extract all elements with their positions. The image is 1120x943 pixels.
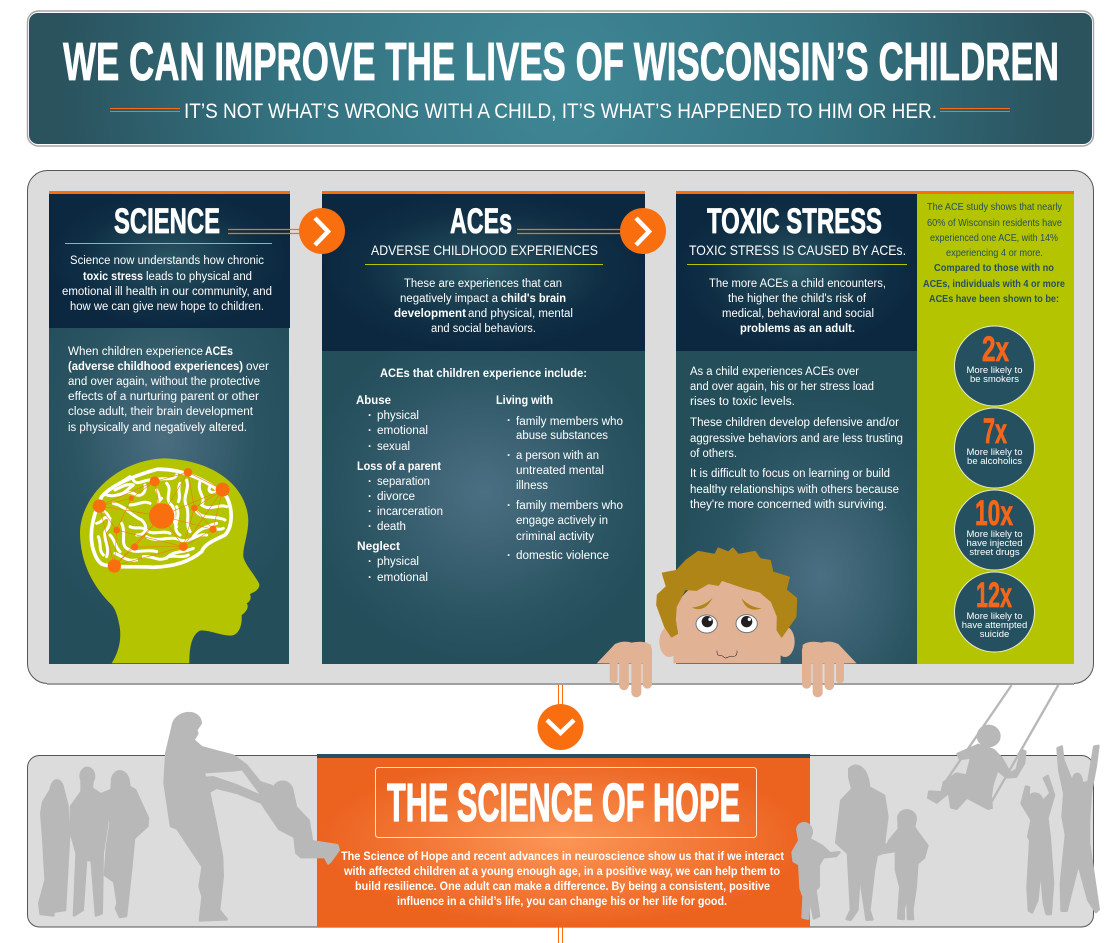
ace study text: experiencing 4 or more. bbox=[946, 247, 1043, 259]
stat circle: 12x attempted suicide: 12x bbox=[976, 576, 1012, 615]
connector lines and chevron bbox=[538, 685, 584, 943]
stat circle: 12x attempted suicide bbox=[954, 572, 1034, 652]
stat circle: 2x smokers bbox=[954, 326, 1034, 406]
stat circle: 12x attempted suicide: have attempted bbox=[962, 620, 1027, 631]
panel: toxic stress bbox=[676, 191, 1074, 664]
stat circle: 2x smokers: be smokers bbox=[970, 374, 1019, 385]
science intro text: Science now understands how chronic bbox=[70, 255, 264, 267]
science body text: and over again, without the protective bbox=[68, 376, 260, 388]
toxic stress body text: As a child experiences ACEs over bbox=[690, 366, 859, 378]
aces list: left column: · bbox=[368, 506, 372, 518]
child hair bbox=[657, 548, 796, 637]
ace study text: experienced one ACE, with 14% bbox=[930, 232, 1058, 244]
toxic stress intro text bbox=[709, 278, 886, 335]
science body text: over bbox=[246, 361, 269, 373]
ace study text bbox=[923, 201, 1065, 305]
arrow: aces to toxic stress bbox=[517, 208, 666, 254]
science of hope text: build resilience. One adult can make a difference. By being a consistent, positive bbox=[355, 881, 770, 893]
science intro text: toxic stress bbox=[83, 271, 143, 283]
aces list: right column: · bbox=[507, 415, 511, 427]
toxic stress body text: aggressive behaviors and are less trusting bbox=[690, 433, 903, 445]
aces list: right column: a person with an bbox=[516, 450, 599, 462]
toxic stress body text: These children develop defensive and/or bbox=[690, 417, 899, 429]
stat circle: 2x smokers: More likely to bbox=[967, 365, 1022, 376]
aces intro text: child's brain bbox=[501, 293, 566, 305]
aces list: left column: physical bbox=[377, 410, 419, 422]
science body text: is physically and negatively altered. bbox=[68, 422, 247, 434]
aces list: left column: death bbox=[377, 521, 406, 533]
subtitle: IT’S NOT WHAT’S WRONG WITH A CHILD, IT’S WHAT’S HAPPENED TO HIM OR HER. bbox=[184, 100, 937, 123]
aces intro text: negatively impact a bbox=[400, 293, 499, 305]
aces list: right column: illness bbox=[516, 480, 548, 492]
panel: science bbox=[49, 191, 290, 664]
science of hope text: with affected children at a young enough age, in a positive way, we can help them to bbox=[343, 866, 780, 878]
toxic stress body text: of others. bbox=[690, 448, 737, 460]
aces list: left column: Loss of a parent bbox=[357, 461, 441, 473]
science intro text bbox=[62, 255, 272, 313]
icon: head with brain network bbox=[80, 458, 259, 663]
toxic stress intro text: the higher the child's risk of bbox=[728, 293, 867, 305]
aces list: left column: · bbox=[368, 556, 372, 568]
stat circle: 10x injected drugs: 10x bbox=[975, 494, 1013, 533]
aces list: right column: family members who bbox=[516, 416, 623, 428]
left hand bbox=[597, 642, 652, 692]
aces list: left column: physical bbox=[377, 556, 419, 568]
aces list: left column: divorce bbox=[377, 491, 415, 503]
aces list: right column bbox=[496, 395, 623, 562]
stat circle: 7x alcoholics: be alcoholics bbox=[967, 456, 1022, 467]
silhouettes: family group left bbox=[39, 768, 148, 917]
aces list heading: ACEs that children experience include: bbox=[380, 368, 587, 380]
stat circle: 2x smokers: 2x bbox=[982, 330, 1009, 369]
toxic stress body text: It is difficult to focus on learning or build bbox=[690, 468, 890, 480]
aces list: right column: · bbox=[507, 450, 511, 462]
toxic stress intro text: The more ACEs a child encounters, bbox=[709, 278, 886, 290]
ace study text: ACEs, individuals with 4 or more bbox=[923, 278, 1065, 290]
science body text: effects of a nurturing parent or other bbox=[68, 391, 259, 403]
panel: the science of hope bbox=[317, 754, 810, 927]
child face bbox=[659, 577, 795, 663]
science intro text: leads to physical and bbox=[146, 271, 252, 283]
silhouette: adult swinging child bbox=[165, 713, 339, 920]
child eyes and brows bbox=[692, 598, 762, 658]
stat circle: 12x attempted suicide: suicide bbox=[980, 629, 1009, 640]
aces list: left column: Neglect bbox=[357, 541, 400, 553]
arrow: science to aces bbox=[228, 208, 345, 254]
aces list: right column: engage actively in bbox=[516, 515, 608, 527]
aces list: left column: · bbox=[368, 476, 372, 488]
aces list: right column: criminal activity bbox=[516, 531, 594, 543]
aces list: left column: · bbox=[368, 491, 372, 503]
stat circle: 10x injected drugs: More likely to bbox=[967, 529, 1022, 540]
aces list: right column: domestic violence bbox=[516, 550, 609, 562]
main grey panel bbox=[28, 170, 1094, 684]
aces list: left column: · bbox=[368, 410, 372, 422]
toxic stress body text: and over again, his or her stress load bbox=[690, 381, 874, 393]
aces list: left column: · bbox=[368, 441, 372, 453]
stat circle: 10x injected drugs bbox=[954, 490, 1034, 570]
toxic stress intro text: medical, behavioral and social bbox=[722, 308, 874, 320]
stat circle: 12x attempted suicide: More likely to bbox=[967, 611, 1022, 622]
aces list: left column: sexual bbox=[377, 441, 410, 453]
header banner bbox=[28, 11, 1094, 146]
aces list: left column: separation bbox=[377, 476, 430, 488]
aces intro text: development bbox=[394, 308, 466, 320]
aces list: left column: · bbox=[368, 572, 372, 584]
toxic stress intro text: problems as an adult. bbox=[740, 323, 855, 335]
aces intro text bbox=[394, 278, 573, 335]
science body text: (adverse childhood experiences) bbox=[68, 361, 243, 373]
science intro text: how we can give new hope to children. bbox=[70, 301, 264, 313]
science body text bbox=[68, 346, 269, 434]
illustration: worried child peeking bbox=[597, 548, 857, 692]
aces intro text: and physical, mental bbox=[468, 308, 573, 320]
aces list: left column: Abuse bbox=[356, 395, 391, 407]
silhouettes: two people cheering bbox=[1022, 746, 1099, 914]
aces list: left column: emotional bbox=[377, 572, 428, 584]
aces intro text: These are experiences that can bbox=[404, 278, 562, 290]
silhouettes: adult and children holding hands bbox=[793, 766, 927, 920]
stat circle: 7x alcoholics: More likely to bbox=[967, 447, 1022, 458]
ace study text: ACEs have been shown to be: bbox=[929, 293, 1059, 305]
ace study text: 60% of Wisconsin residents have bbox=[927, 217, 1062, 229]
science body text: close adult, their brain development bbox=[68, 406, 254, 418]
aces list: left column bbox=[356, 395, 443, 584]
heading: the science of hope: THE SCIENCE OF HOPE bbox=[387, 773, 740, 833]
aces list: left column: · bbox=[368, 521, 372, 533]
aces list: left column: emotional bbox=[377, 425, 428, 437]
science of hope text bbox=[341, 851, 784, 908]
subheading: toxic stress: TOXIC STRESS IS CAUSED BY ACEs. bbox=[689, 242, 906, 258]
ace study text: Compared to those with no bbox=[934, 262, 1054, 274]
right hand bbox=[802, 642, 857, 692]
silhouette: child on swing bbox=[928, 685, 1058, 809]
panel: aces bbox=[322, 191, 645, 664]
science of hope text: The Science of Hope and recent advances in neuroscience show us that if we interact bbox=[341, 851, 784, 863]
toxic stress body text: they're more concerned with surviving. bbox=[690, 499, 887, 511]
aces list: left column: incarceration bbox=[377, 506, 443, 518]
aces list: left column: · bbox=[368, 425, 372, 437]
toxic stress body text: healthy relationships with others because bbox=[690, 484, 899, 496]
aces list: right column: Living with bbox=[496, 395, 553, 407]
stat circle: 10x injected drugs: street drugs bbox=[969, 547, 1020, 558]
ace study text: The ACE study shows that nearly bbox=[927, 201, 1063, 213]
heading: aces: ACEs bbox=[450, 202, 512, 241]
science body text: When children experience bbox=[68, 346, 203, 358]
science body text: ACEs bbox=[205, 346, 233, 358]
heading: toxic stress: TOXIC STRESS bbox=[707, 202, 882, 241]
heading: science: SCIENCE bbox=[114, 202, 220, 241]
bottom grey panel bbox=[28, 756, 1094, 927]
aces list: right column: abuse substances bbox=[516, 430, 608, 442]
subheading: aces: ADVERSE CHILDHOOD EXPERIENCES bbox=[371, 242, 598, 258]
stat circle: 7x alcoholics: 7x bbox=[983, 412, 1007, 451]
aces intro text: and social behaviors. bbox=[431, 323, 536, 335]
aces list: right column: untreated mental bbox=[516, 465, 604, 477]
science of hope text: influence in a child’s life, you can change his or her life for good. bbox=[397, 896, 727, 908]
aces list: right column: · bbox=[507, 500, 511, 512]
science intro text: emotional ill health in our community, and bbox=[62, 286, 272, 298]
aces list: right column: family members who bbox=[516, 500, 623, 512]
toxic stress body text bbox=[690, 366, 903, 511]
aces list: right column: · bbox=[507, 550, 511, 562]
stat circle: 10x injected drugs: have injected bbox=[967, 538, 1022, 549]
panel: ace study statistics bbox=[917, 194, 1074, 664]
stat circle: 7x alcoholics bbox=[954, 408, 1034, 488]
toxic stress body text: rises to toxic levels. bbox=[690, 396, 795, 408]
